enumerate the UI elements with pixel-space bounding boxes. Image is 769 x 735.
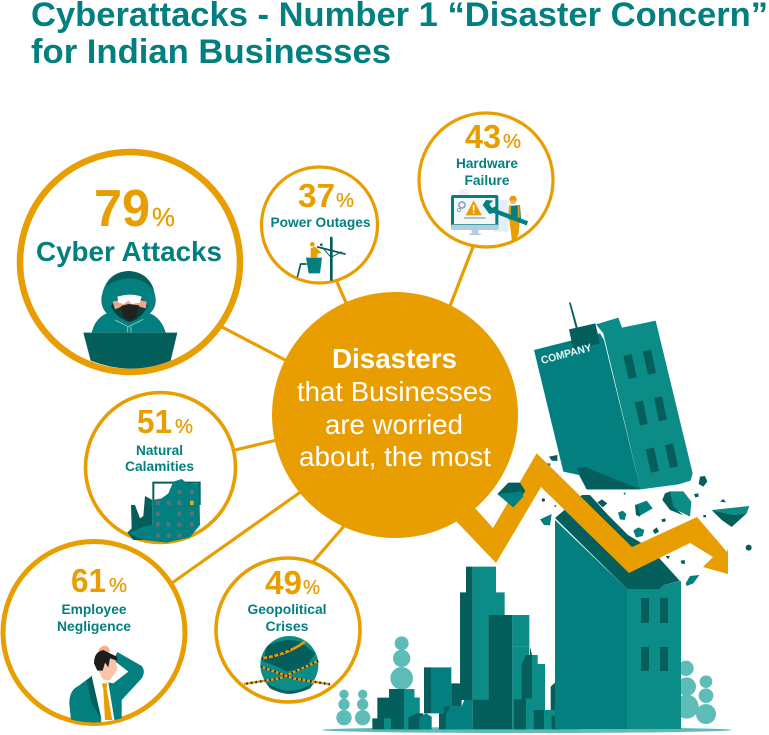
icon: technician and monitor — [451, 189, 527, 242]
panel: geopolitical crises 49% — [216, 558, 360, 702]
panel: cyber attacks 79%: 79 — [94, 180, 150, 238]
icon: hacker at laptop — [83, 271, 177, 369]
icon: damaged building — [127, 479, 201, 543]
connector lines — [172, 247, 473, 583]
ground ellipse — [322, 727, 732, 733]
panel: natural calamities 51%: % — [175, 416, 193, 438]
windows — [623, 349, 678, 473]
center circle: disasters: that Businesses — [297, 376, 492, 407]
panel: geopolitical crises 49%: Geopolitical — [248, 602, 326, 617]
flying rubble — [540, 455, 752, 586]
panel: employee negligence 61%: Employee — [62, 602, 127, 617]
panel: hardware failure 43%: % — [503, 131, 521, 153]
illustration: falling company building — [534, 302, 693, 489]
panel: employee negligence 61%: % — [109, 575, 127, 597]
skyline buildings — [372, 689, 423, 729]
illustration: bottom city skyline — [322, 567, 732, 733]
panel: employee negligence 61%: Negligence — [57, 619, 131, 634]
panel: employee negligence 61% — [3, 542, 185, 727]
center circle: disasters — [272, 292, 518, 538]
title: for Indian Businesses — [31, 33, 391, 71]
panel: employee negligence 61%: 61 — [71, 562, 106, 599]
icon: worried businessman — [69, 646, 144, 727]
title — [31, 0, 768, 71]
center circle: disasters: Disasters — [332, 343, 457, 374]
panel: hardware failure 43% — [419, 113, 553, 247]
rock on arrow — [497, 483, 525, 507]
panel: natural calamities 51%: Natural — [136, 443, 183, 458]
panel: natural calamities 51% — [86, 392, 236, 543]
panel: geopolitical crises 49%: Crises — [266, 619, 309, 634]
icon: globe wrapped in caution tape — [244, 636, 330, 694]
panel: natural calamities 51%: Calamities — [125, 459, 194, 474]
panel: power outages 37% — [262, 167, 378, 283]
panel: hardware failure 43%: 43 — [465, 118, 501, 155]
panel: power outages 37%: % — [336, 190, 354, 212]
center circle: disasters: about, the most — [299, 441, 491, 472]
panel: cyber attacks 79%: % — [152, 202, 175, 232]
panel: hardware failure 43%: Failure — [464, 173, 510, 188]
icon: electrician on utility pole — [297, 237, 346, 281]
center circle: disasters: are worried — [325, 409, 463, 440]
panel: cyber attacks 79%: Cyber Attacks — [36, 236, 222, 267]
panel: cyber attacks 79% — [20, 152, 240, 372]
panel: power outages 37%: Power Outages — [270, 215, 371, 230]
company label: COMPANY — [540, 342, 593, 367]
panel: natural calamities 51%: 51 — [137, 403, 172, 440]
illustration: broken lower building — [555, 495, 681, 729]
panel: hardware failure 43%: Hardware — [456, 156, 518, 171]
orange declining arrow — [455, 453, 728, 574]
panel: geopolitical crises 49%: % — [303, 577, 320, 599]
panel: power outages 37%: 37 — [298, 177, 335, 214]
trees — [336, 636, 716, 725]
panel: geopolitical crises 49%: 49 — [265, 564, 302, 601]
